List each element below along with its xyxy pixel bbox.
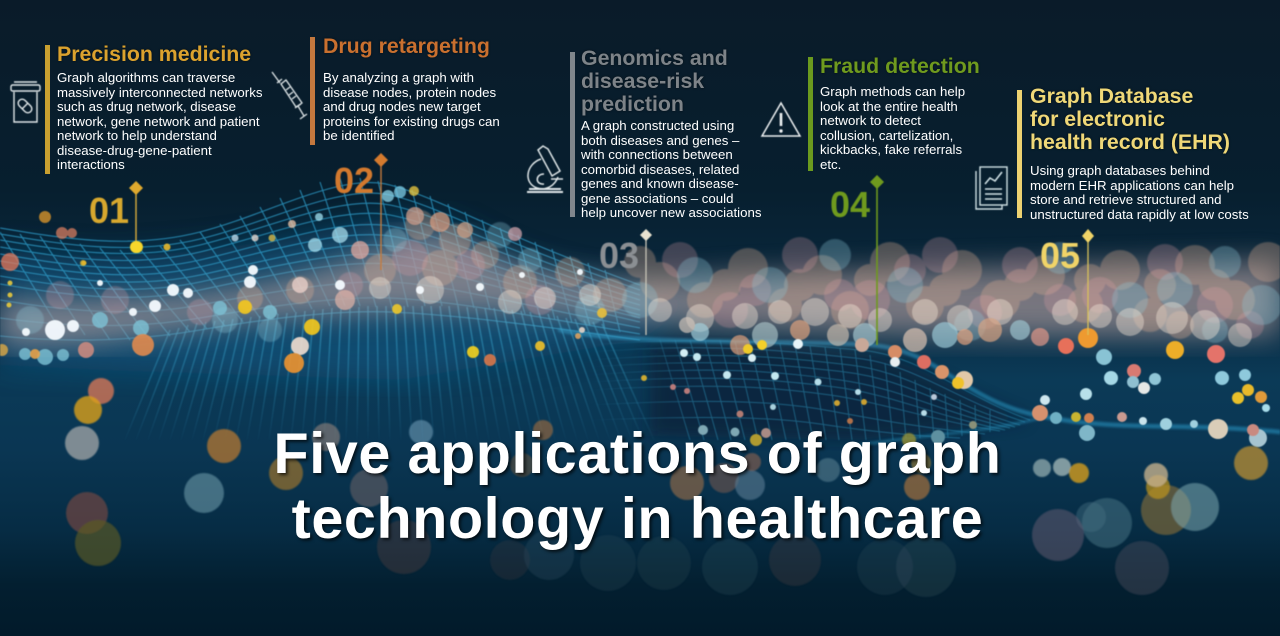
body text: drug retargeting: proteins for existing drugs can <box>323 114 500 128</box>
mesh: left wave surface <box>0 178 640 340</box>
bokeh: band, bright row <box>369 276 1252 347</box>
body text: genomics: help uncover new associations <box>581 205 761 220</box>
panel: fraud detection <box>808 54 980 172</box>
body text: fraud detection: kickbacks, fake referrals <box>820 142 962 157</box>
body text: precision medicine: network to help understand <box>57 128 217 143</box>
body text: genomics: A graph constructed using <box>581 118 734 133</box>
body text: precision medicine: disease-drug-gene-patient <box>57 142 212 158</box>
icon: syringe <box>272 72 307 119</box>
body text: precision medicine <box>57 70 262 172</box>
panel: drug retargeting <box>310 34 500 145</box>
accent bar 4 <box>808 57 813 171</box>
body text: graph database: store and retrieve structured and <box>1030 192 1222 207</box>
icon: pill bottle <box>11 82 40 122</box>
body text: precision medicine: massively interconnected networks <box>57 84 262 100</box>
body text: drug retargeting <box>323 70 500 143</box>
body text: fraud detection: look at the entire health <box>820 98 958 114</box>
mesh: right surface <box>590 340 1030 440</box>
mesh: dark right surface <box>650 345 1030 440</box>
body text: fraud detection: Graph methods can help <box>820 84 965 99</box>
body text: genomics: genes and known disease- <box>581 176 739 191</box>
body text: precision medicine: interactions <box>57 157 125 172</box>
marker 02: 02 <box>334 160 374 201</box>
body text: precision medicine: such as drug network, disease <box>57 99 236 114</box>
heading: fraud detection: Fraud detection <box>820 54 980 78</box>
body text: drug retargeting: be identified <box>323 128 394 143</box>
bokeh: left cluster <box>1 186 522 310</box>
body text: precision medicine: Graph algorithms can traverse <box>57 70 235 85</box>
body text: fraud detection: etc. <box>820 156 841 172</box>
body text: graph database <box>1030 163 1249 222</box>
title: technology in healthcare <box>292 487 983 551</box>
title <box>273 422 1002 554</box>
mesh: fan of perspective lines <box>125 306 654 440</box>
body text: fraud detection: collusion, cartelization, <box>820 128 953 142</box>
body text: genomics: comorbid diseases, related <box>581 162 739 176</box>
bokeh: teal left points <box>19 301 277 365</box>
heading: genomics: disease-risk <box>581 69 704 93</box>
marker 03: 03 <box>599 235 639 276</box>
accent bar 3 <box>570 52 575 217</box>
icon: microscope <box>527 146 563 192</box>
title: Five applications of graph <box>273 422 1002 486</box>
body text: genomics <box>581 118 761 220</box>
marker 03 <box>599 229 652 335</box>
body text: precision medicine: network, gene network and patient <box>57 114 260 128</box>
body text: fraud detection <box>820 84 965 172</box>
marker 05: 05 <box>1040 235 1080 276</box>
bokeh: band, soft peach <box>237 210 1280 339</box>
marker 02 <box>334 153 388 270</box>
bokeh: lower row, warm and cool <box>679 317 1049 355</box>
bokeh: warm left points <box>0 241 607 373</box>
marker 01: 01 <box>89 190 129 231</box>
body text: fraud detection: network to detect <box>820 113 921 128</box>
heading: drug retargeting: Drug retargeting <box>323 34 490 58</box>
accent bar 2 <box>310 37 315 145</box>
accent bar 1 <box>45 45 50 174</box>
accent bar 5 <box>1017 90 1022 218</box>
bokeh: band, blue <box>16 222 1280 343</box>
body text: drug retargeting: By analyzing a graph with <box>323 70 474 85</box>
heading: graph database: for electronic <box>1030 107 1165 131</box>
marker 01 <box>89 181 143 253</box>
bokeh: mesh points right <box>641 328 1270 447</box>
heading: genomics: prediction <box>581 92 684 116</box>
heading: genomics: Genomics and <box>581 46 728 70</box>
panel: graph database for EHR <box>1017 84 1249 222</box>
marker 04 <box>830 175 884 345</box>
bokeh: band, pink <box>46 237 1264 339</box>
icon: warning triangle <box>762 103 800 136</box>
body text: drug retargeting: and drug nodes new target <box>323 99 481 114</box>
body text: graph database: modern EHR applications can help <box>1030 178 1234 192</box>
panel: precision medicine <box>45 42 262 174</box>
icon: report document <box>976 167 1007 209</box>
heading: graph database: Graph Database <box>1030 84 1193 108</box>
heading: graph database <box>1030 84 1230 154</box>
body text: genomics: with connections between <box>581 147 733 162</box>
haze band behind bokeh <box>0 233 1280 346</box>
mesh body glow <box>0 217 700 380</box>
marker 05 <box>1040 229 1094 335</box>
bokeh: bright left points <box>22 265 583 340</box>
heading: graph database: health record (EHR) <box>1030 130 1230 154</box>
heading: precision medicine: Precision medicine <box>57 42 251 66</box>
mesh: glowing ribbon <box>560 330 1280 445</box>
body text: graph database: Using graph databases behind <box>1030 163 1210 178</box>
bokeh: large out-of-focus foreground <box>65 378 1268 597</box>
heading: genomics <box>581 46 728 116</box>
marker 04: 04 <box>830 184 870 225</box>
body text: genomics: both diseases and genes – <box>581 132 739 148</box>
body text: genomics: gene associations – could <box>581 190 733 206</box>
body text: graph database: unstructured data rapidly at low costs <box>1030 206 1249 222</box>
panel: genomics and disease-risk prediction <box>570 46 761 220</box>
body text: drug retargeting: disease nodes, protein nodes <box>323 84 496 100</box>
